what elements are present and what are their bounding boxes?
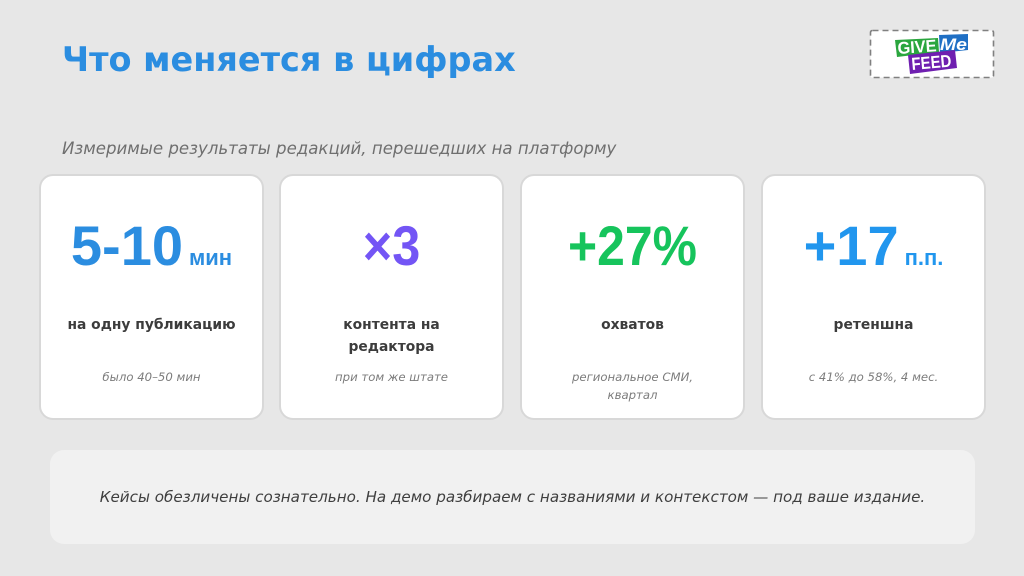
metric note: при том же штате	[335, 370, 448, 384]
callout: Кейсы обезличены сознательно. На демо разбираем с названиями и контекстом — под ваше издание.	[100, 488, 925, 506]
subtitle: Измеримые результаты редакций, перешедших на платформу	[62, 139, 616, 158]
panel: content per editor	[279, 174, 504, 420]
logo: Give Me Feed: FEED	[911, 51, 952, 74]
metric value: ×3	[363, 214, 420, 277]
panel: publication time	[39, 174, 264, 420]
metric note	[572, 370, 693, 402]
metric label: контента на	[343, 317, 440, 333]
metric label: охватов	[601, 317, 664, 333]
logo: Give Me Feed: Me	[940, 35, 967, 54]
metric value: +17 п.п.	[804, 214, 943, 277]
logo: Give Me Feed	[870, 30, 994, 78]
metric note: квартал	[608, 388, 657, 402]
panel: reach	[520, 174, 745, 420]
callout	[50, 450, 975, 544]
metric note: региональное СМИ,	[572, 370, 693, 384]
panel: retention	[761, 174, 986, 420]
metric label: ретеншна	[834, 317, 913, 333]
metric label: редактора	[348, 339, 434, 355]
title: Что меняется в цифрах	[62, 40, 516, 79]
logo: Give Me Feed: GIVE	[897, 36, 937, 58]
metric note: с 41% до 58%, 4 мес.	[809, 370, 938, 384]
metric value: +27%	[568, 214, 697, 277]
metric label: на одну публикацию	[67, 317, 236, 333]
metric note: было 40–50 мин	[102, 370, 201, 384]
metric value: 5-10 мин	[71, 214, 232, 277]
metric label	[343, 317, 440, 355]
